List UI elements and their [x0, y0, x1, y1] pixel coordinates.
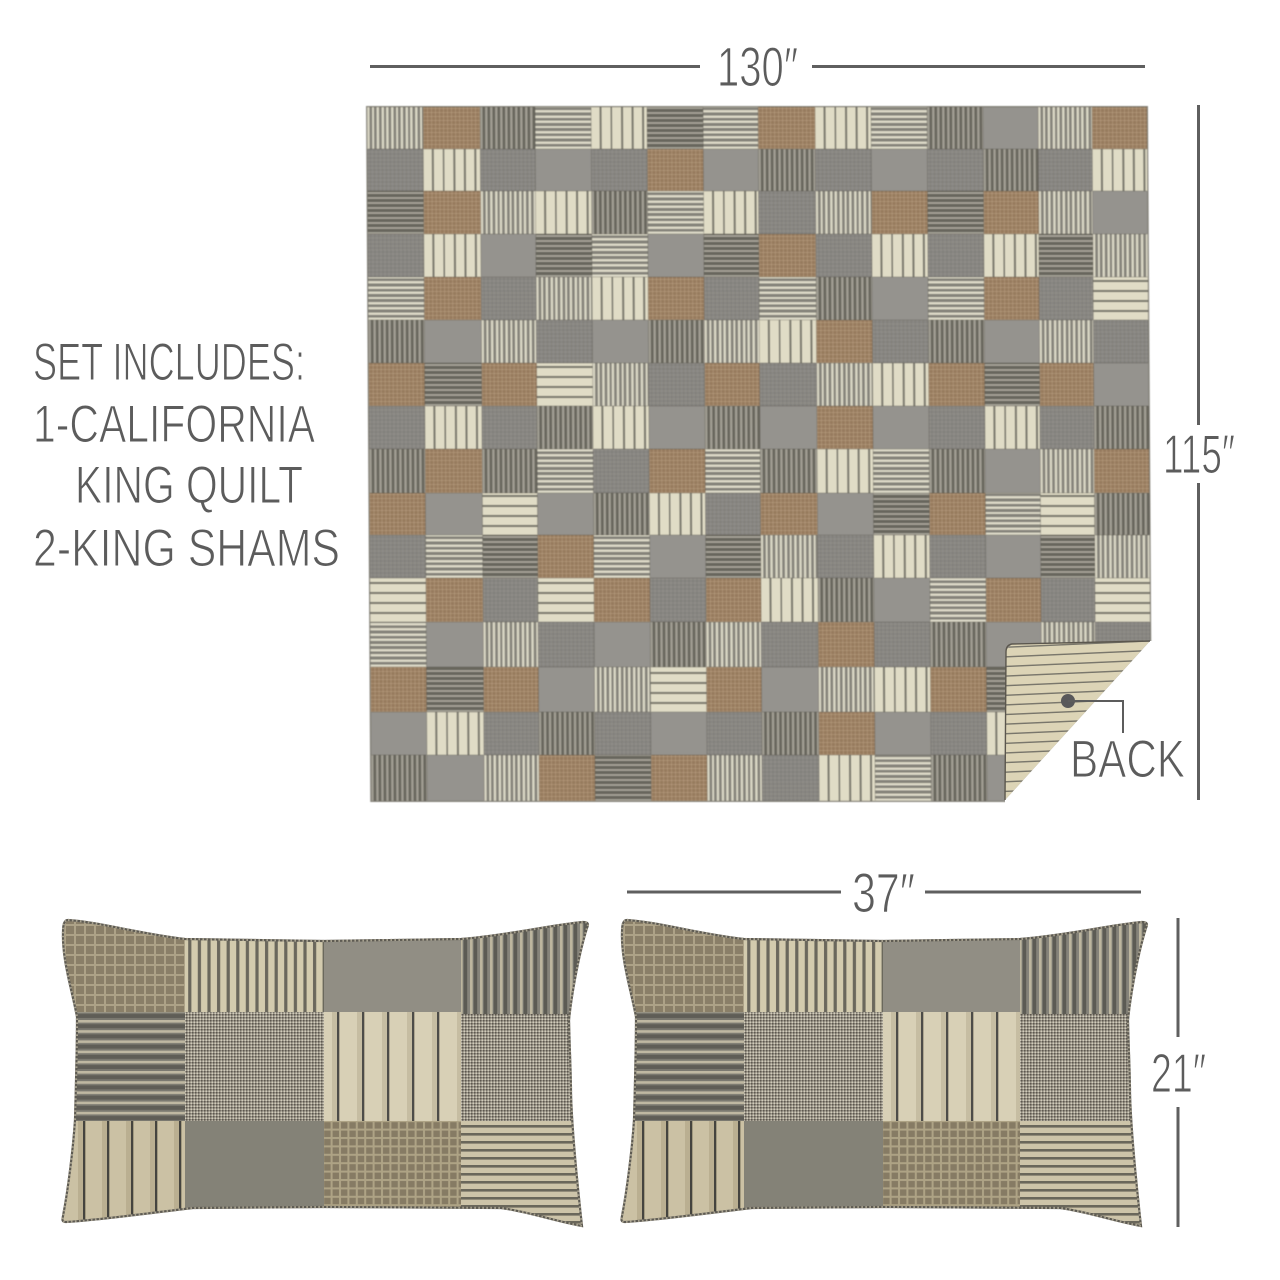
text block: set includes: KING QUILT — [75, 456, 303, 515]
dimension: quilt width 130 inches: 130″ — [717, 35, 798, 98]
dimension: sham height 21 inches: 21″ — [1151, 1042, 1206, 1104]
text block: set includes: 2-KING SHAMS — [33, 519, 340, 578]
text block: set includes: SET INCLUDES: — [33, 333, 305, 392]
dimension: sham width 37 inches: 37″ — [852, 861, 915, 924]
callout: back — [1061, 694, 1185, 789]
dimension: quilt height 115 inches: 115″ — [1163, 423, 1235, 485]
pillow sham: right — [620, 918, 1148, 1228]
back flap of quilt — [1005, 641, 1170, 812]
pillow sham: left — [61, 918, 590, 1228]
callout: back: BACK — [1070, 730, 1185, 789]
quilt patchwork panel — [367, 107, 1151, 801]
text block: set includes — [33, 333, 340, 578]
text block: set includes: 1-CALIFORNIA — [33, 395, 315, 454]
